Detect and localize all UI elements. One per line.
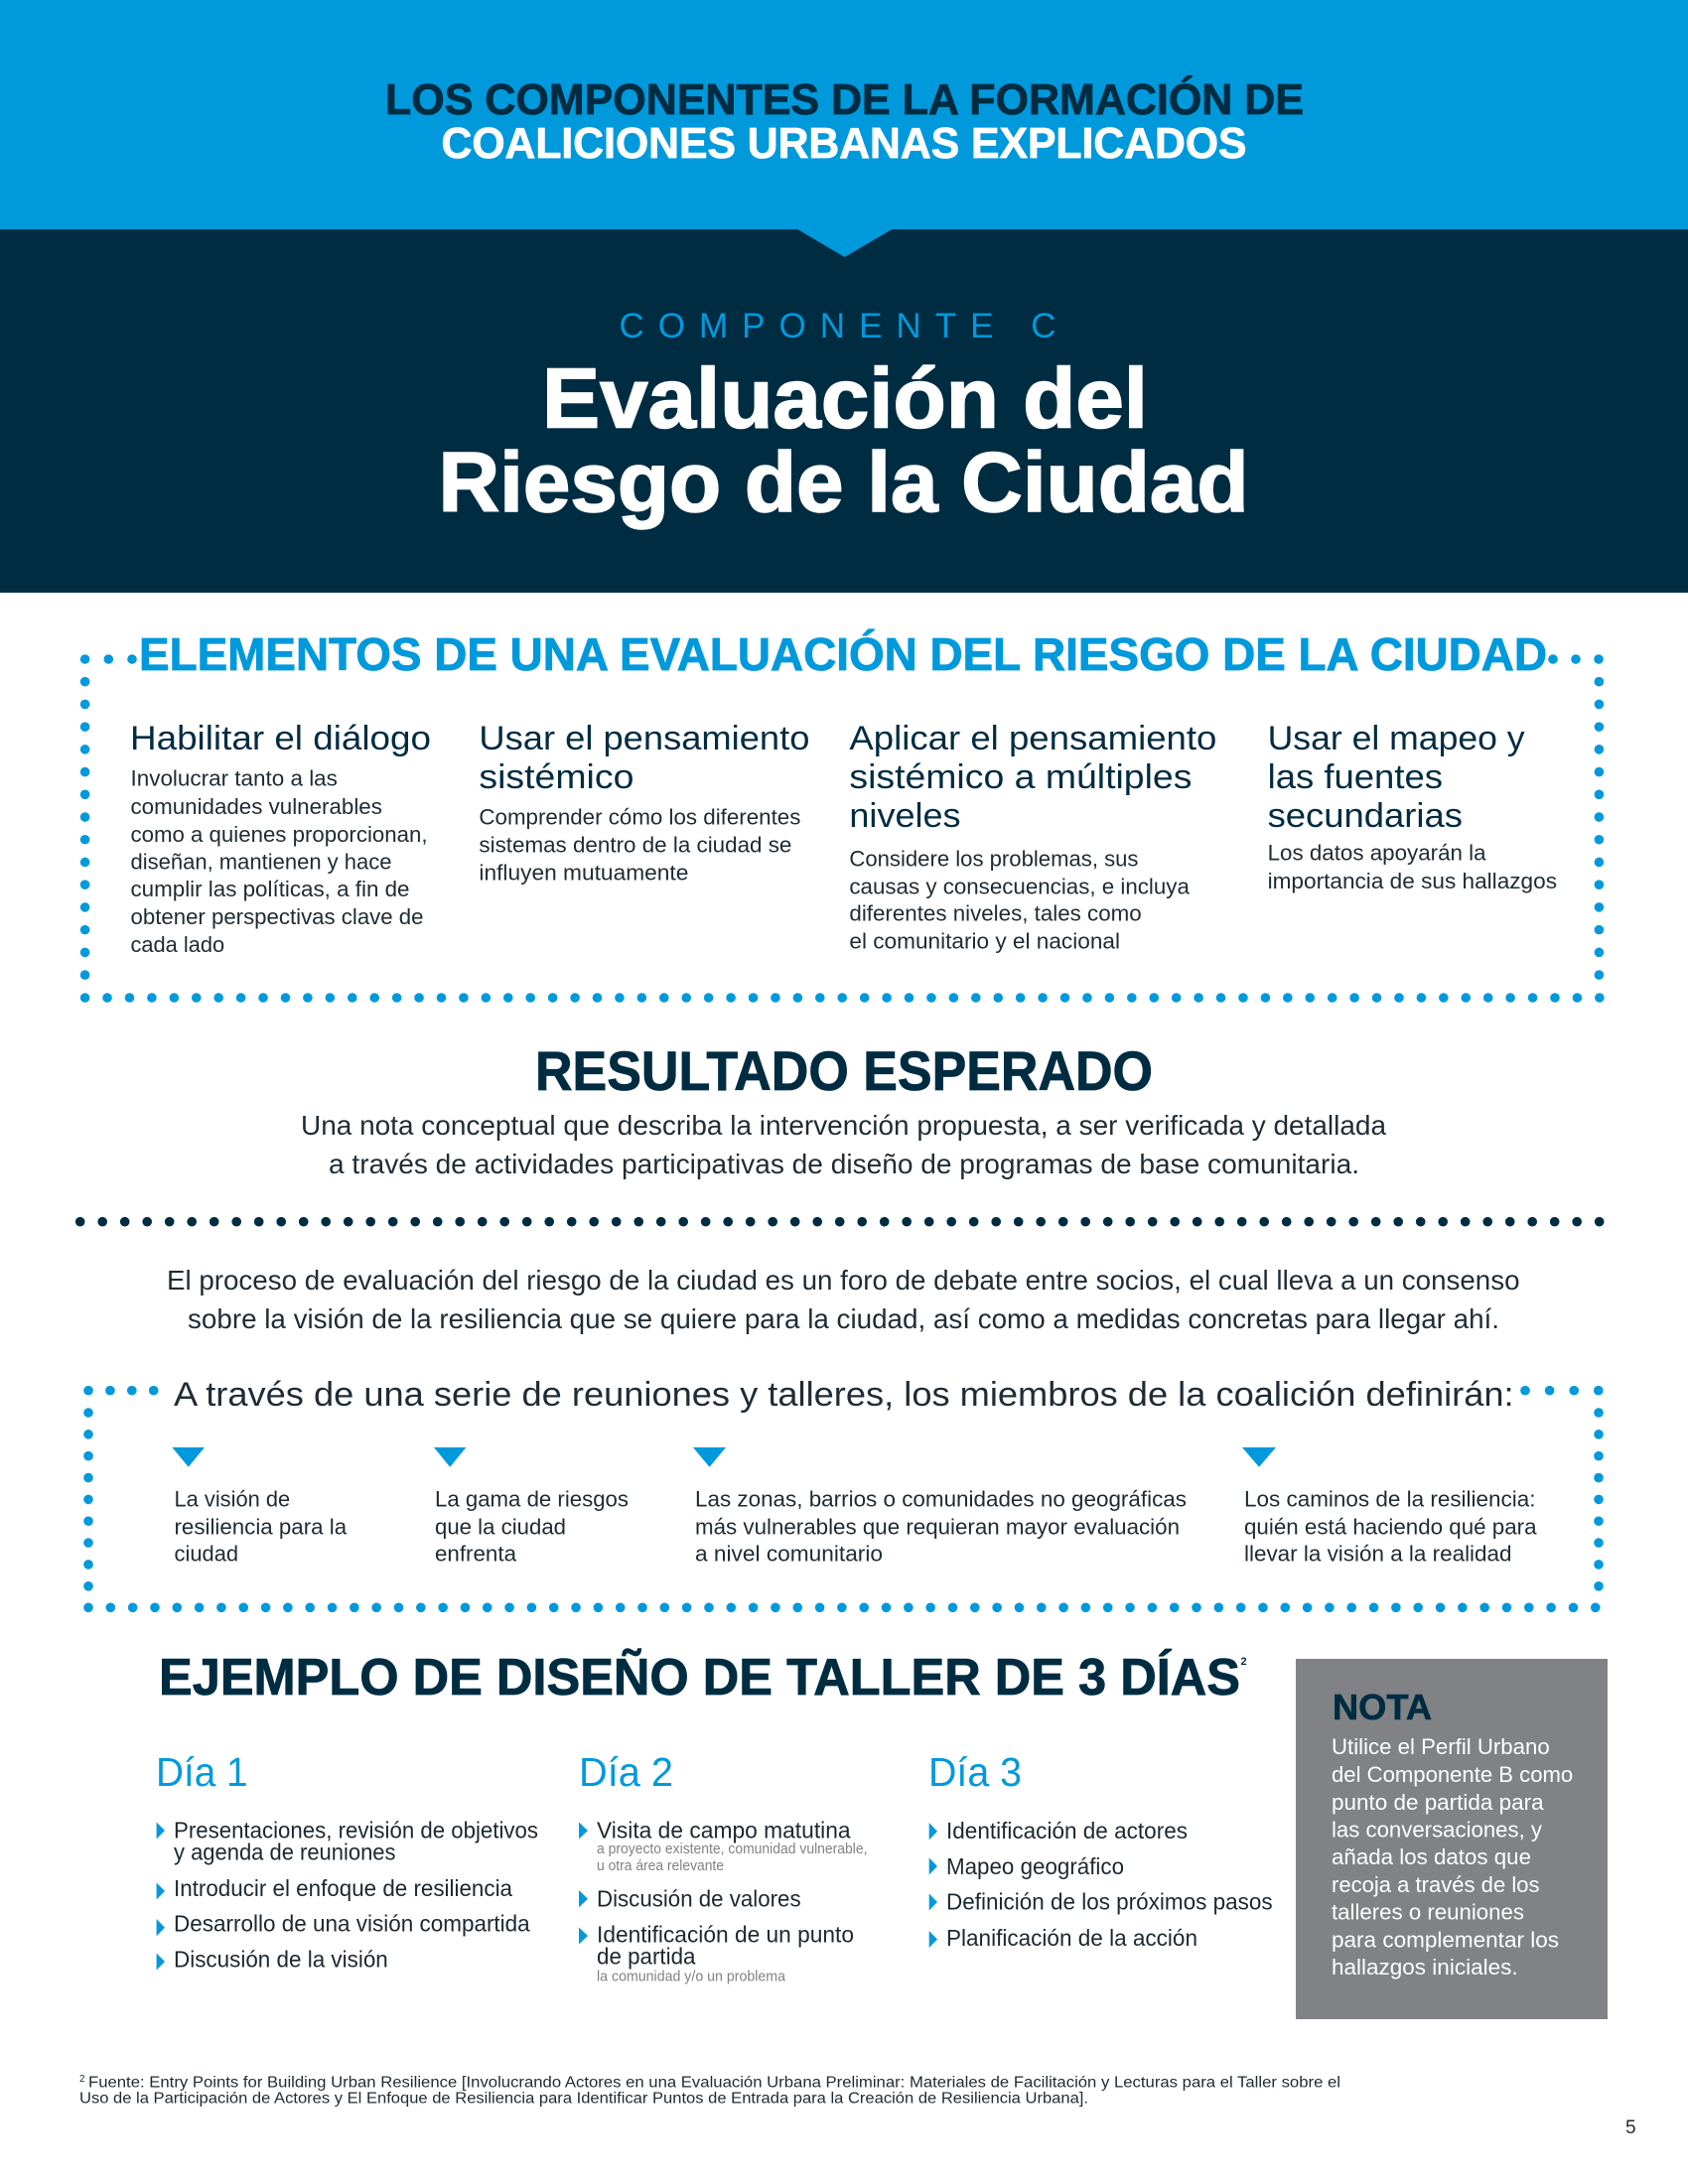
day heading: Día 3 bbox=[928, 1749, 1022, 1795]
nota text: añada los datos que bbox=[1332, 1844, 1531, 1869]
panel: elementos bbox=[85, 628, 1600, 998]
column: usar el pensamiento sistémico bbox=[479, 720, 809, 886]
column: aplicar el pensamiento sistémico: Aplicar el pensamiento bbox=[849, 720, 1216, 757]
column: habilitar el diálogo: cada lado bbox=[131, 932, 224, 957]
heading: resultado esperado: RESULTADO ESPERADO bbox=[535, 1039, 1153, 1102]
nota text: para complementar los bbox=[1332, 1928, 1559, 1953]
column: día 3: Identificación de actores bbox=[946, 1818, 1188, 1843]
page number: 5 bbox=[1625, 2117, 1636, 2138]
column: día 1: y agenda de reuniones bbox=[174, 1839, 395, 1864]
column: día 3: Mapeo geográfico bbox=[946, 1853, 1124, 1879]
column: habilitar el diálogo: diseñan, mantienen y hace bbox=[131, 850, 391, 875]
item: visión bbox=[172, 1447, 348, 1567]
item: riesgos: La gama de riesgos bbox=[435, 1487, 629, 1512]
column: usar el mapeo: Los datos apoyarán la bbox=[1268, 841, 1486, 866]
nota heading: NOTA bbox=[1333, 1687, 1432, 1727]
column: habilitar el diálogo: como a quienes proporcionan, bbox=[131, 822, 427, 847]
item: riesgos: enfrenta bbox=[435, 1542, 517, 1567]
column: día 2: Identificación de un punto bbox=[597, 1922, 854, 1948]
nota text: del Componente B como bbox=[1332, 1762, 1573, 1787]
column: día 1: Presentaciones, revisión de objetivos bbox=[174, 1818, 538, 1843]
column: habilitar el diálogo bbox=[130, 720, 431, 957]
column: usar el pensamiento sistémico: Usar el pensamiento bbox=[479, 720, 809, 757]
main title line 1: Evaluación del bbox=[542, 351, 1148, 447]
component label: COMPONENTE C bbox=[620, 307, 1056, 345]
column: habilitar el diálogo: cumplir las políticas, a fin de bbox=[131, 877, 409, 901]
panel heading: A través de una serie de reuniones y talleres, los miembros de la coalición definirán: bbox=[174, 1376, 1514, 1414]
column: aplicar el pensamiento sistémico: niveles bbox=[849, 797, 961, 835]
item: visión: resiliencia para la bbox=[175, 1515, 348, 1540]
column: día 1: Desarrollo de una visión compartida bbox=[174, 1911, 530, 1937]
column: usar el pensamiento sistémico: sistemas dentro de la ciudad se bbox=[479, 832, 791, 857]
item: zonas: Las zonas, barrios o comunidades no geográficas bbox=[695, 1487, 1187, 1512]
item: zonas: a nivel comunitario bbox=[695, 1542, 883, 1567]
bullets bbox=[929, 1823, 937, 1948]
column: día 2: a proyecto existente, comunidad vulnerable, bbox=[597, 1842, 868, 1857]
column: usar el mapeo: importancia de sus hallazgos bbox=[1268, 869, 1557, 893]
column: día 2: de partida bbox=[597, 1943, 696, 1969]
item: caminos: quién está haciendo qué para bbox=[1244, 1515, 1537, 1540]
header band: blue title bbox=[0, 0, 1688, 229]
notch arrow bbox=[796, 228, 894, 257]
text block: proceso: sobre la visión de la resiliencia que se quiere para la ciudad, así como a medidas concretas para llegar ahí. bbox=[188, 1303, 1499, 1334]
bullets bbox=[579, 1823, 588, 1944]
column: habilitar el diálogo: Habilitar el diálogo bbox=[130, 720, 431, 757]
item: zonas: más vulnerables que requieran mayor evaluación bbox=[695, 1515, 1180, 1540]
panel: nota bbox=[1296, 1659, 1608, 2019]
item: zonas bbox=[693, 1447, 1187, 1567]
nota text bbox=[1332, 1734, 1573, 1979]
section heading: ELEMENTOS DE UNA EVALUACIÓN DEL RIESGO DE LA CIUDAD bbox=[139, 628, 1547, 680]
item: caminos: Los caminos de la resiliencia: bbox=[1244, 1487, 1535, 1512]
panel: reuniones y talleres bbox=[88, 1376, 1600, 1607]
column: día 1 bbox=[156, 1749, 538, 1973]
column: día 3: Planificación de la acción bbox=[946, 1925, 1197, 1951]
item: caminos: llevar la visión a la realidad bbox=[1244, 1542, 1511, 1567]
column: aplicar el pensamiento sistémico: causas y consecuencias, e incluya bbox=[849, 875, 1191, 899]
nota text: las conversaciones, y bbox=[1332, 1818, 1542, 1843]
item: caminos bbox=[1242, 1447, 1537, 1567]
column: usar el mapeo: Usar el mapeo y bbox=[1268, 720, 1525, 757]
footnote: Uso de la Participación de Actores y El Enfoque de Resiliencia para Identificar Puntos de Entrada para la Creación de Resiliencia Urbana]. bbox=[79, 2090, 1088, 2107]
column: usar el mapeo: secundarias bbox=[1268, 797, 1463, 835]
dotted frame bbox=[85, 659, 1600, 998]
bullets bbox=[157, 1823, 165, 1970]
heading line 2: COALICIONES URBANAS EXPLICADOS bbox=[441, 119, 1247, 168]
nota text: punto de partida para bbox=[1332, 1790, 1544, 1815]
text block: proceso: El proceso de evaluación del riesgo de la ciudad es un foro de debate entre socios, el cual lleva a un consenso bbox=[167, 1265, 1519, 1296]
column: aplicar el pensamiento sistémico: el comunitario y el nacional bbox=[849, 929, 1120, 954]
header band: dark component title bbox=[0, 228, 1688, 593]
column: día 2 bbox=[579, 1749, 868, 1985]
column: habilitar el diálogo: Involucrar tanto a las bbox=[131, 766, 338, 791]
column: día 3: Definición de los próximos pasos bbox=[946, 1889, 1273, 1915]
column: habilitar el diálogo: comunidades vulnerables bbox=[131, 794, 382, 819]
footnote: Fuente: Entry Points for Building Urban Resilience [Involucrando Actores en una Evaluación Urbana Preliminar: Materiales de Facilitación y Lecturas para el Taller sobre el bbox=[88, 2074, 1340, 2091]
column: día 1: Discusión de la visión bbox=[174, 1947, 388, 1973]
nota text: talleres o reuniones bbox=[1332, 1900, 1524, 1924]
text block: resultado: Una nota conceptual que describa la intervención propuesta, a ser verificada y detallada bbox=[301, 1110, 1386, 1141]
heading line 1: LOS COMPONENTES DE LA FORMACIÓN DE bbox=[385, 74, 1304, 124]
nota text: Utilice el Perfil Urbano bbox=[1332, 1734, 1550, 1759]
nota text: recoja a través de los bbox=[1332, 1872, 1539, 1897]
text block: proceso bbox=[167, 1265, 1519, 1334]
column: día 2: u otra área relevante bbox=[597, 1858, 724, 1874]
column: aplicar el pensamiento sistémico: diferentes niveles, tales como bbox=[849, 901, 1142, 926]
column: usar el pensamiento sistémico: sistémico bbox=[479, 758, 633, 796]
column: día 2: Discusión de valores bbox=[597, 1886, 801, 1912]
column: aplicar el pensamiento sistémico bbox=[849, 720, 1216, 954]
heading: ejemplo de diseño: EJEMPLO DE DISEÑO DE TALLER DE 3 DÍAS bbox=[159, 1648, 1240, 1706]
main title line 2: Riesgo de la Ciudad bbox=[439, 436, 1249, 530]
item: visión: La visión de bbox=[175, 1487, 290, 1512]
footnote bbox=[79, 2074, 1340, 2107]
column: aplicar el pensamiento sistémico: Considere los problemas, sus bbox=[849, 847, 1138, 872]
text block: resultado: a través de actividades participativas de diseño de programas de base comunitaria. bbox=[329, 1149, 1359, 1179]
column: habilitar el diálogo: obtener perspectivas clave de bbox=[131, 904, 423, 929]
column: día 1: Introducir el enfoque de resiliencia bbox=[174, 1875, 512, 1901]
day heading: Día 1 bbox=[156, 1749, 248, 1795]
heading: ejemplo de diseño: 2 bbox=[1241, 1656, 1247, 1668]
column: usar el mapeo: las fuentes bbox=[1268, 758, 1443, 796]
item: riesgos bbox=[434, 1447, 629, 1567]
column: día 3 bbox=[928, 1749, 1273, 1951]
column: usar el pensamiento sistémico: influyen mutuamente bbox=[479, 861, 688, 886]
text block: resultado bbox=[301, 1110, 1386, 1179]
dotted frame bbox=[88, 1391, 1600, 1607]
column: día 2: Visita de campo matutina bbox=[597, 1818, 851, 1843]
column: usar el pensamiento sistémico: Comprender cómo los diferentes bbox=[479, 805, 800, 830]
column: usar el mapeo bbox=[1268, 720, 1557, 893]
item: riesgos: que la ciudad bbox=[435, 1515, 566, 1540]
column: día 2: la comunidad y/o un problema bbox=[597, 1970, 786, 1985]
nota text: hallazgos iniciales. bbox=[1332, 1955, 1518, 1979]
day heading: Día 2 bbox=[579, 1749, 673, 1795]
footnote: 2 bbox=[79, 2074, 85, 2085]
column: aplicar el pensamiento sistémico: sistémico a múltiples bbox=[849, 758, 1192, 796]
item: visión: ciudad bbox=[175, 1542, 238, 1567]
